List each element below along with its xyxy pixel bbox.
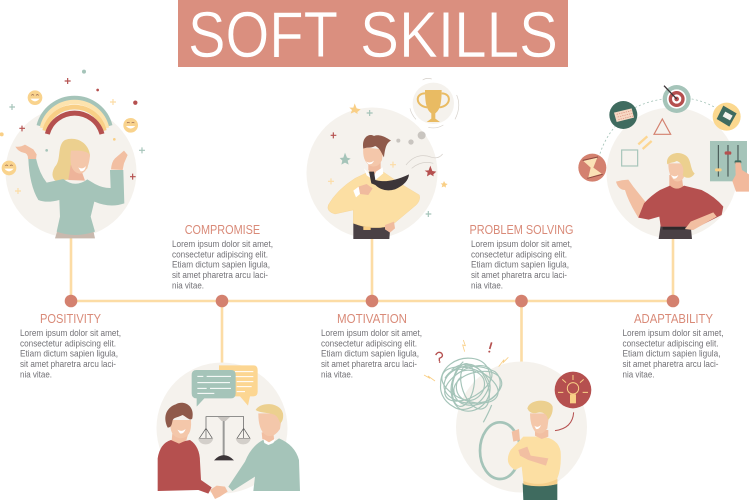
text: adaptability: Lorem ipsum dolor sit amet, bbox=[622, 328, 724, 338]
title banner: SKILLS bbox=[360, 0, 558, 71]
icon: trophy bubble bbox=[410, 78, 459, 128]
text: positivity: Etiam dictum sapien ligula, bbox=[20, 349, 118, 359]
timeline bbox=[65, 236, 679, 365]
title banner bbox=[178, 0, 568, 71]
text: compromise: Lorem ipsum dolor sit amet, bbox=[172, 239, 273, 249]
man in teal sweater bbox=[228, 404, 300, 491]
text: problem solving: nia vitae. bbox=[471, 280, 503, 290]
text: compromise bbox=[172, 223, 273, 290]
text: adaptability: Etiam dictum sapien ligula, bbox=[622, 349, 720, 359]
speech bubble: teal bbox=[192, 370, 236, 407]
text: problem solving: PROBLEM SOLVING bbox=[470, 223, 574, 237]
text: adaptability: nia vitae. bbox=[622, 369, 654, 379]
illustration: motivation bbox=[306, 78, 459, 239]
handshake bbox=[210, 486, 228, 499]
text: problem solving bbox=[470, 223, 574, 290]
text: compromise: Etiam dictum sapien ligula, bbox=[172, 260, 270, 270]
text: motivation: nia vitae. bbox=[321, 369, 353, 379]
woman bbox=[15, 139, 128, 238]
text: problem solving: Lorem ipsum dolor sit amet, bbox=[471, 239, 572, 249]
icon: target bbox=[663, 85, 691, 113]
text: positivity: Lorem ipsum dolor sit amet, bbox=[20, 328, 121, 338]
text: positivity: POSITIVITY bbox=[40, 312, 102, 326]
stars and sparkles bbox=[328, 103, 448, 217]
sparkles bbox=[0, 70, 145, 194]
man with tie bbox=[328, 135, 420, 239]
shapes: triangle, arrows and square bbox=[622, 119, 671, 166]
icon: hourglass bbox=[578, 154, 606, 182]
text: motivation bbox=[321, 312, 422, 379]
icon: keyboard bbox=[609, 101, 637, 129]
text: adaptability: consectetur adipiscing elit. bbox=[622, 338, 718, 348]
icon: rainbow bbox=[39, 98, 110, 134]
man bbox=[508, 401, 561, 500]
illustration: problem solving bbox=[424, 340, 591, 500]
man in red sweater bbox=[158, 403, 212, 494]
text: compromise: sit amet pharetra arcu laci- bbox=[172, 270, 268, 280]
text: motivation: consectetur adipiscing elit. bbox=[321, 338, 417, 348]
symbols: question, exclamation, bolts bbox=[424, 340, 508, 381]
icon: tangled thread bbox=[437, 358, 520, 479]
illustration: compromise bbox=[156, 362, 300, 499]
dashed orbit bbox=[600, 99, 715, 154]
icon: notebook bbox=[713, 103, 741, 131]
text: problem solving: Etiam dictum sapien ligula, bbox=[471, 260, 569, 270]
text: adaptability: sit amet pharetra arcu laci- bbox=[622, 359, 718, 369]
text: positivity: consectetur adipiscing elit. bbox=[20, 338, 116, 348]
text: motivation: MOTIVATION bbox=[337, 312, 407, 326]
text: compromise: consectetur adipiscing elit. bbox=[172, 249, 268, 259]
text: problem solving: sit amet pharetra arcu laci- bbox=[471, 270, 567, 280]
text: motivation: Etiam dictum sapien ligula, bbox=[321, 349, 419, 359]
text: positivity: sit amet pharetra arcu laci- bbox=[20, 359, 116, 369]
illustration: positivity bbox=[0, 70, 145, 238]
woman bbox=[616, 153, 723, 239]
icon: smiley faces bbox=[2, 90, 138, 175]
text: adaptability bbox=[622, 312, 724, 379]
text: compromise: COMPROMISE bbox=[185, 223, 260, 237]
text: compromise: nia vitae. bbox=[172, 280, 204, 290]
icon: slider panel bbox=[710, 141, 749, 192]
text: positivity bbox=[20, 312, 121, 379]
text: problem solving: consectetur adipiscing elit. bbox=[471, 249, 567, 259]
icon: light bulb bbox=[555, 372, 591, 431]
text: positivity: nia vitae. bbox=[20, 369, 52, 379]
text: motivation: sit amet pharetra arcu laci- bbox=[321, 359, 417, 369]
text: adaptability: ADAPTABILITY bbox=[634, 312, 714, 326]
title banner: SOFT bbox=[188, 0, 338, 71]
speech bubble: yellow bbox=[219, 365, 258, 406]
icon: scales bbox=[198, 417, 251, 460]
illustration: adaptability bbox=[578, 85, 749, 239]
text: motivation: Lorem ipsum dolor sit amet, bbox=[321, 328, 422, 338]
